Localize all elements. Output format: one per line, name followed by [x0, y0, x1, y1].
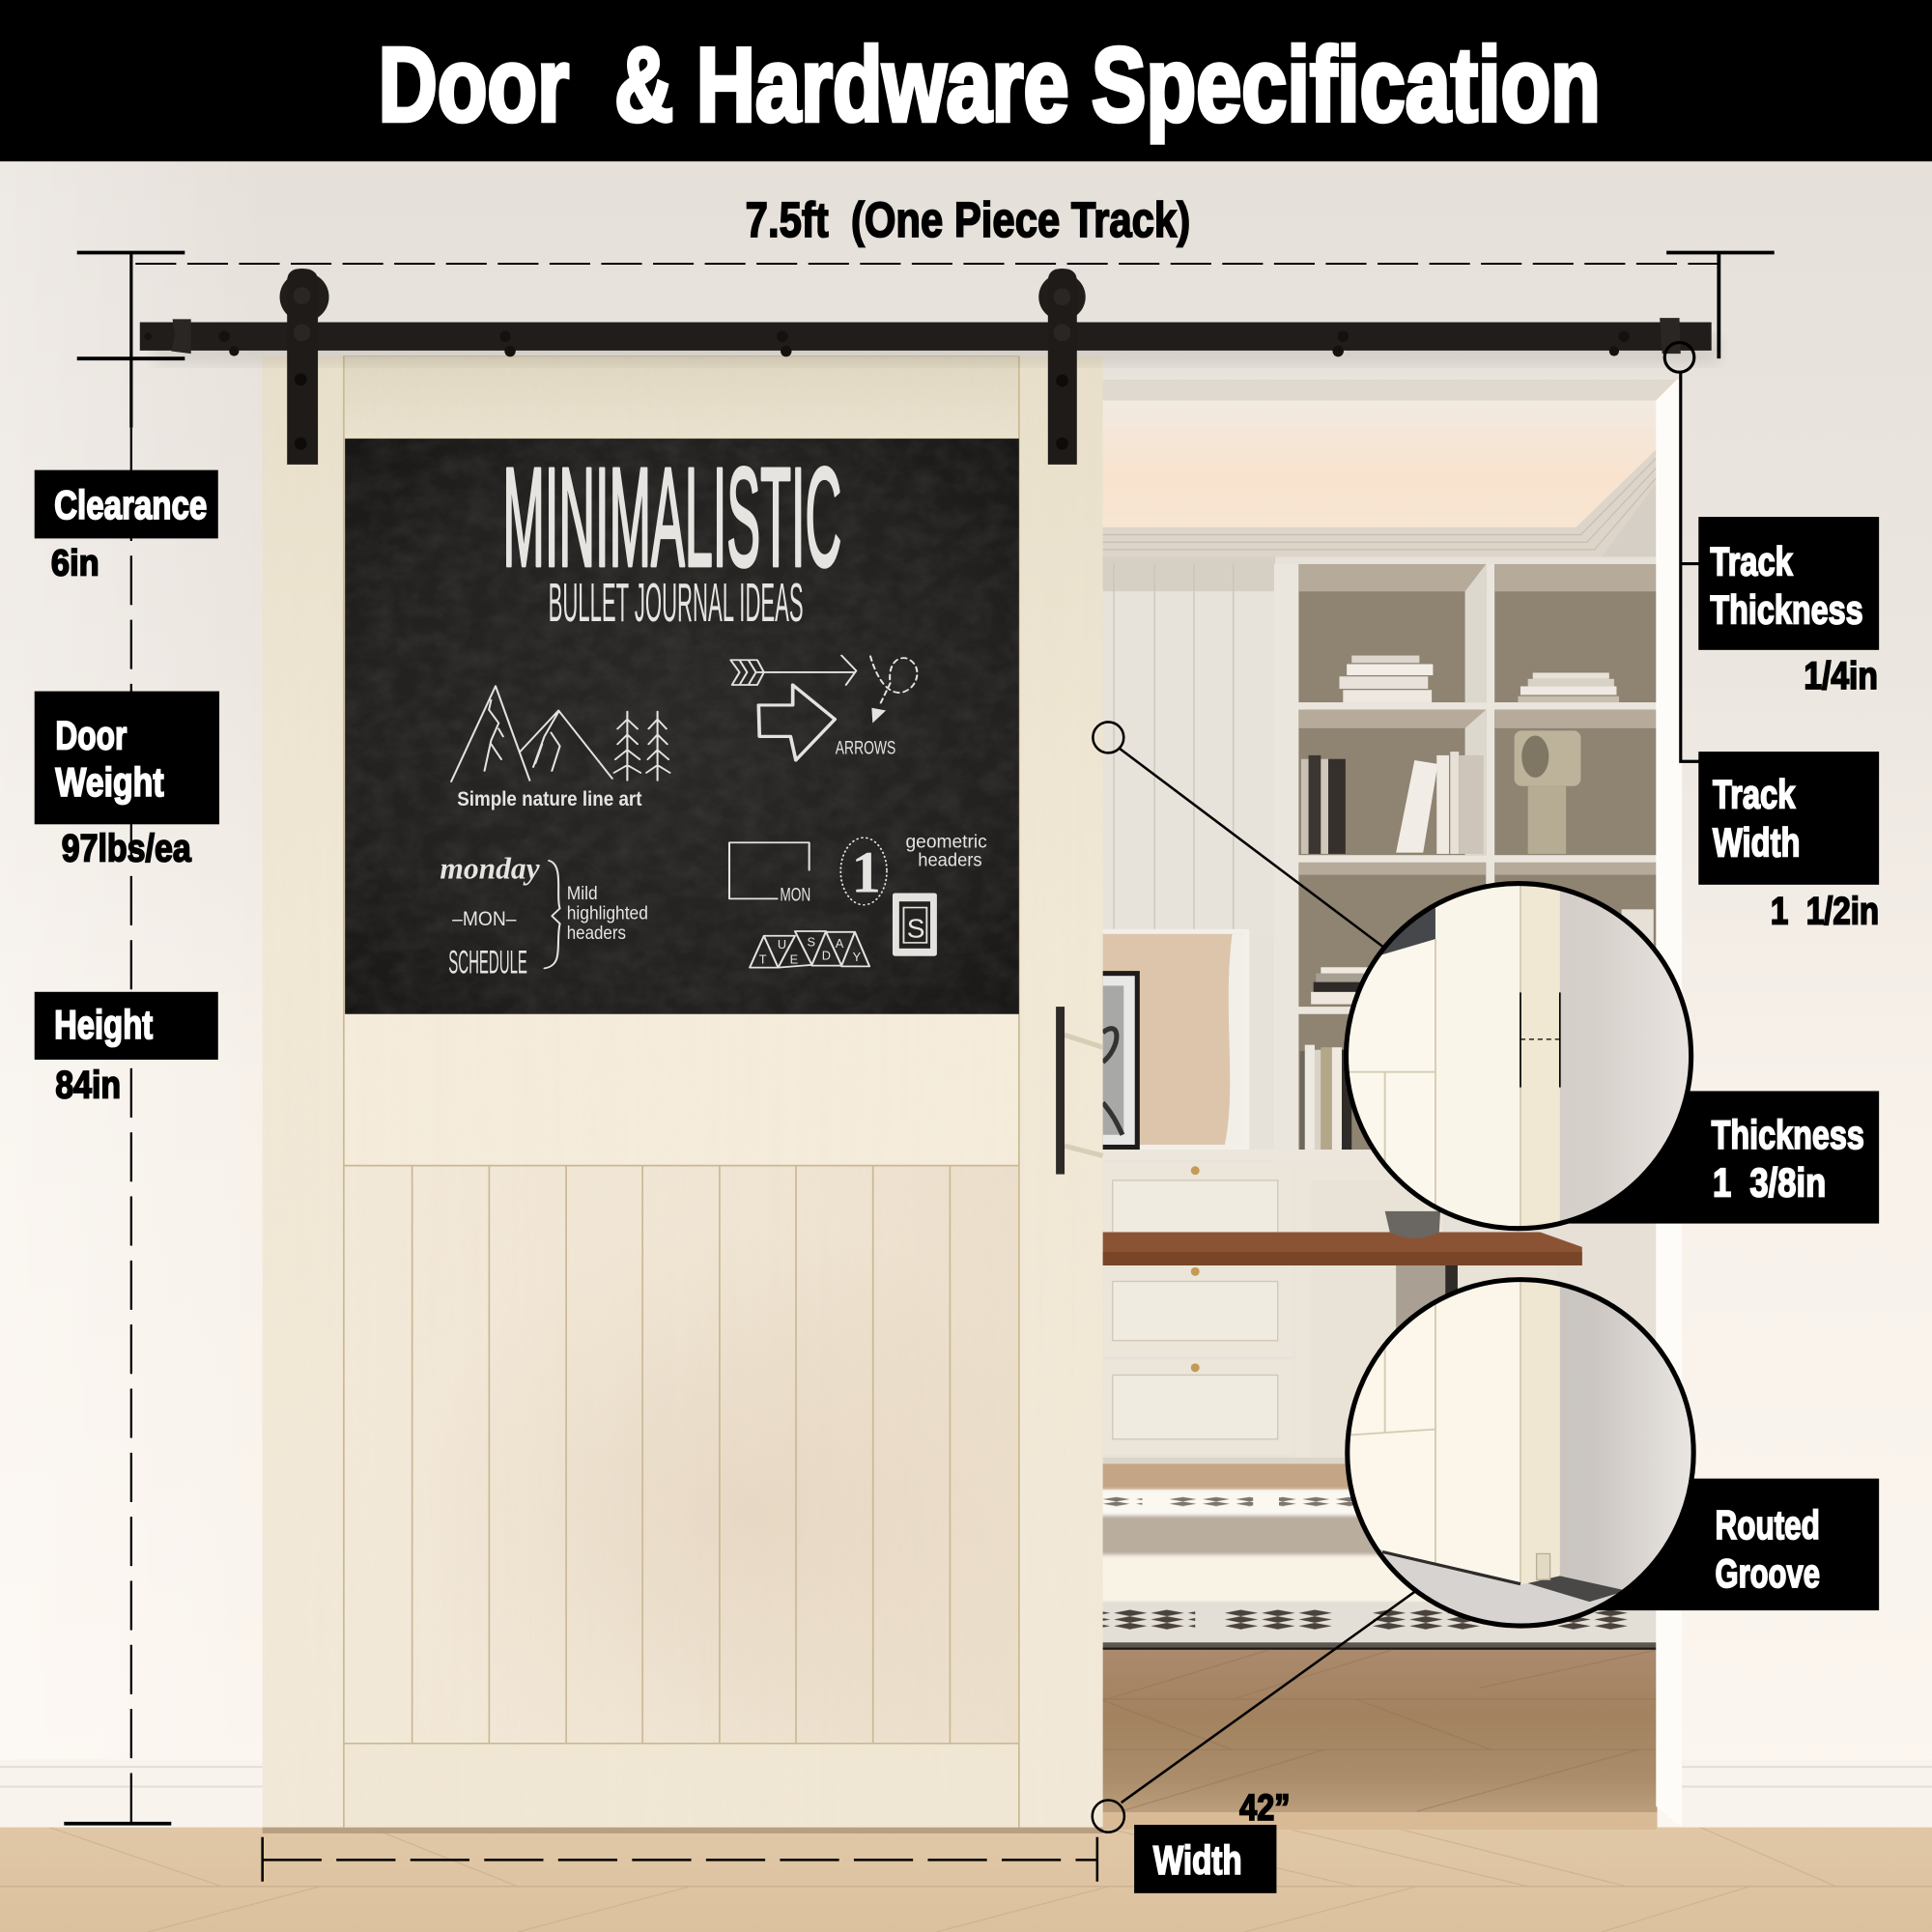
label: width — [1134, 1825, 1276, 1893]
label: track thickness: Track — [1710, 539, 1793, 584]
callout connector: track thickness and width — [1664, 343, 1699, 761]
floor — [0, 1828, 1932, 1932]
chalk bunting letters: S — [807, 935, 815, 950]
barn door — [263, 356, 1103, 1828]
room interior seen through the doorway — [1096, 401, 1663, 1830]
chalk bunting letters: T — [759, 952, 767, 966]
ceiling — [1103, 401, 1658, 527]
chalk text: geometric headers — [906, 833, 987, 871]
chalk text: highlighted headers — [567, 884, 648, 944]
chalk drawings — [451, 656, 937, 968]
label: routed groove: Routed — [1716, 1502, 1820, 1548]
zoom circle: door thickness — [1343, 881, 1700, 1233]
chalk text: geometric headers: headers — [918, 851, 982, 871]
chalk bunting letters: Y — [853, 950, 862, 964]
label: width: Width — [1153, 1837, 1242, 1883]
wood grain — [263, 356, 1103, 1828]
track bolts — [144, 330, 1630, 356]
chalkboard: SCHEDULE — [448, 945, 527, 981]
chalk text: highlighted headers: highlighted — [567, 904, 648, 924]
left hanger — [280, 269, 329, 465]
chalk bunting letters — [759, 935, 862, 966]
right hanger — [1038, 269, 1086, 465]
baseboards — [0, 1759, 1932, 1828]
bookshelf — [1274, 564, 1658, 1168]
door mid rail — [344, 1014, 1019, 1166]
interior wall to right of cabinets — [1557, 1224, 1658, 1470]
chalk text: monday: monday — [440, 851, 541, 885]
table — [1103, 1211, 1582, 1265]
thickness measure marks — [1520, 992, 1560, 1088]
value: door weight: 97lbs/ea — [62, 828, 192, 870]
label: track thickness: Thickness — [1710, 586, 1863, 632]
zoom circle: routed groove — [1343, 1275, 1700, 1633]
chalk numeral 1: 1 — [851, 839, 881, 905]
track length label: 7.5ft (One Piece Track) — [746, 192, 1190, 247]
title bar — [0, 0, 1932, 161]
chalkboard — [345, 438, 1019, 1014]
dashed arrow — [870, 656, 917, 724]
sliding track — [140, 318, 1712, 356]
books on shelves — [1300, 656, 1654, 1150]
callout connector: routed groove — [1093, 1592, 1414, 1833]
track stops — [171, 318, 1681, 354]
cabinet fronts — [1103, 1150, 1661, 1463]
label: track width: Width — [1713, 819, 1801, 865]
interior floor and rug — [1096, 1458, 1663, 1830]
wall art — [1103, 929, 1249, 1150]
chalk bunting letters: A — [836, 936, 844, 951]
label: door weight: Door — [55, 713, 127, 758]
value: clearance: 6in — [51, 543, 99, 584]
chalk letter S: S — [907, 914, 924, 944]
label: clearance: Clearance — [54, 482, 207, 527]
dimension: clearance and height — [64, 252, 185, 1824]
door frame — [263, 356, 1103, 1828]
chalkboard: MINIMALISTIC — [502, 438, 841, 595]
bunting triangles — [750, 931, 869, 968]
brace — [545, 861, 560, 968]
label: track thickness — [1698, 517, 1879, 650]
plank panel — [344, 356, 1019, 1828]
chalkboard: BULLET JOURNAL IDEAS — [549, 572, 804, 633]
framed photo — [1103, 971, 1140, 1150]
label: door weight — [35, 692, 219, 824]
label: track width — [1698, 752, 1879, 885]
callout connector: thickness — [1093, 722, 1382, 947]
label: thickness: Thickness — [1712, 1112, 1864, 1157]
S badge — [893, 893, 937, 956]
value: track thickness: 1/4in — [1804, 655, 1878, 697]
chalk bunting letters: U — [778, 937, 786, 952]
label: routed groove: Groove — [1716, 1550, 1820, 1596]
block arrow — [758, 685, 835, 760]
arrows — [730, 656, 856, 685]
label: routed groove — [1565, 1479, 1879, 1610]
label: height: Height — [54, 1002, 153, 1047]
rug diamonds — [1103, 1497, 1632, 1630]
label: height — [35, 992, 218, 1060]
chalk bunting letters: D — [822, 949, 831, 963]
crown moulding — [1103, 450, 1656, 557]
value: track width: 1 1/2in — [1771, 891, 1879, 933]
chalk text: MON: –MON– — [452, 906, 517, 930]
door handle — [1056, 1007, 1103, 1175]
value: width: 42” — [1239, 1787, 1290, 1829]
label: thickness — [1565, 1091, 1879, 1224]
label: thickness: 1 3/8in — [1713, 1160, 1826, 1206]
label: track width: Track — [1713, 772, 1796, 817]
chalk label: nature: Simple nature line art — [457, 786, 642, 810]
value: height: 84in — [55, 1064, 121, 1106]
dimension: track length — [135, 252, 1775, 358]
floor wedge — [1379, 1549, 1613, 1623]
mountains and trees — [451, 686, 669, 781]
label: door weight: Weight — [55, 759, 164, 805]
track shadow — [154, 335, 1719, 365]
chalk text: geometric headers: geometric — [906, 833, 987, 853]
chalk text: highlighted headers: Mild — [567, 884, 598, 904]
groove notch — [1537, 1553, 1550, 1579]
door jamb and opening bevel — [1103, 380, 1682, 1828]
chalk bunting letters: E — [790, 952, 798, 966]
cup — [1385, 1211, 1440, 1238]
header box — [729, 842, 810, 898]
chalk label: arrows: ARROWS — [836, 739, 895, 759]
title: Door & Hardware Specification — [379, 26, 1601, 143]
dimension: door width — [263, 1837, 1097, 1882]
dotted circle — [840, 838, 887, 905]
panelled wall — [1103, 557, 1275, 936]
chalk text: MON label: MON — [780, 885, 810, 905]
chalk text: highlighted headers: headers — [567, 923, 626, 944]
label: clearance — [35, 470, 218, 538]
